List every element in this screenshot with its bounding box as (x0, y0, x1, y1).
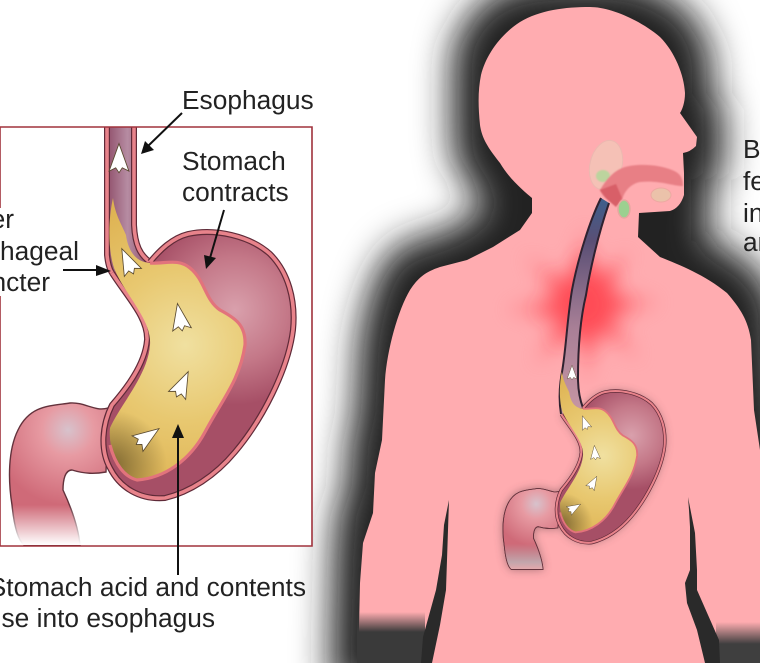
throat dark (600, 184, 622, 207)
label: lower esophageal sphincter (0, 204, 79, 297)
green gland (618, 200, 630, 218)
large esophagus (105, 127, 150, 285)
arrow: esophagus (141, 113, 182, 154)
label: stomach contracts: contracts (182, 177, 289, 207)
arm lower shadow right (716, 622, 760, 663)
panel: stomach detail box border (0, 127, 312, 546)
left arm gap (421, 500, 449, 663)
large duodenum (5, 403, 108, 545)
large white arrows (109, 144, 197, 452)
label: stomach contracts: Stomach (182, 146, 286, 176)
small white arrows (566, 365, 601, 516)
label: stomach acid (0, 572, 306, 633)
salivary gland (651, 188, 671, 202)
body silhouette glow (358, 7, 760, 663)
arrow: stomach contracts (204, 210, 224, 269)
large stomach (103, 198, 294, 498)
panel: stomach detail box background (0, 127, 312, 546)
right arm gap (685, 497, 720, 663)
body silhouette (358, 7, 760, 663)
small stomach shadow (503, 391, 665, 569)
label: stomach contracts (182, 146, 289, 207)
arm lower shadow left (357, 612, 425, 663)
throat structures (584, 137, 683, 218)
small esophagus (560, 198, 609, 414)
arrow: stomach acid (172, 424, 184, 575)
small stomach (503, 372, 665, 569)
tongue (600, 165, 683, 205)
arrow: sphincter (63, 265, 111, 276)
chest burn glow (505, 225, 660, 385)
label: burning feeling (743, 134, 760, 257)
palate (584, 137, 628, 193)
label: esophagus: Esophagus (182, 85, 314, 115)
tonsil green (596, 170, 610, 182)
